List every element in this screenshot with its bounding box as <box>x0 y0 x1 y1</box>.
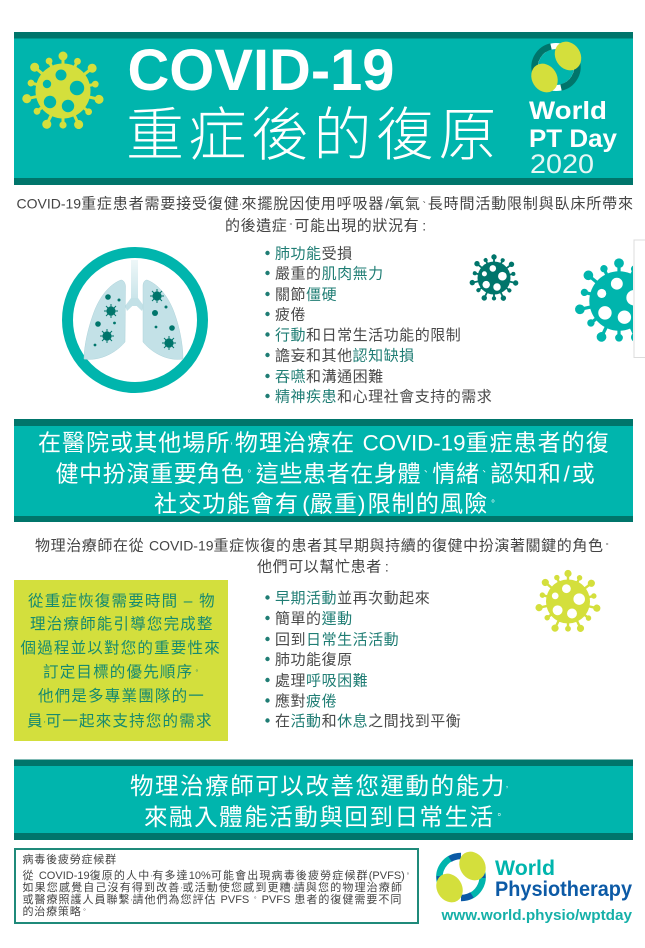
icon: lungs in ring <box>68 252 202 388</box>
World PT Day logo: 2020 <box>530 149 594 179</box>
paragraph: key role: 他們可以幫忙患者: <box>257 558 389 576</box>
title <box>126 38 501 168</box>
title: 重症後的復原 <box>126 103 501 168</box>
banner: role of physiotherapy: 健中扮演重要角色。這些患者在身體、情緒、認知和/或 <box>56 460 595 486</box>
list: how physiotherapists help: 在活動和休息之間找到平衡 <box>275 713 461 730</box>
callout: lime box: 員,可一起來支持您的需求 <box>27 711 213 730</box>
panel: post-viral fatigue syndrome: 病毒後疲勞症候群 <box>22 852 117 866</box>
icon: dark virus <box>469 254 519 302</box>
World Physiotherapy logo: Physiotherapy <box>495 878 632 901</box>
callout: lime box: 訂定目標的優先順序。 <box>43 663 200 681</box>
list: possible conditions: 嚴重的肌肉無力 <box>275 266 384 282</box>
list: possible conditions: 肺功能受損 <box>275 246 353 262</box>
panel: post-viral fatigue syndrome: 或醫療照護人員聯繫,請他們為您評估 PVFS 。 PVFS 患者的復健需要不同 <box>22 892 402 906</box>
list: how physiotherapists help: 回到日常生活活動 <box>275 632 399 648</box>
list: possible conditions: 行動和日常生活功能的限制 <box>275 327 461 344</box>
callout: lime box: 他們是多專業團隊的一 <box>38 687 205 705</box>
icon: lime virus small <box>535 570 601 633</box>
callout: lime box: 從重症恢復需要時間 – 物 <box>28 592 216 610</box>
banner: improve ability: 來融入體能活動與回到日常生活。 <box>144 804 506 830</box>
banner: improve ability: 物理治療師可以改善您運動的能力, <box>130 773 510 799</box>
intro text: 的後遺症。可能出現的狀況有: <box>225 218 426 234</box>
list: how physiotherapists help: 處理呼吸困難 <box>275 672 368 690</box>
list: possible conditions: 關節僵硬 <box>275 286 337 304</box>
website url: www.world.physio/wptday <box>440 907 633 924</box>
banner: improve ability <box>14 760 633 840</box>
title: COVID-19 <box>128 38 394 103</box>
intro text <box>16 196 634 234</box>
icon: teal virus clipped <box>575 258 633 342</box>
list: how physiotherapists help: 肺功能復原 <box>275 652 353 668</box>
callout: lime box: 理治療師能引導您完成整 <box>30 615 214 633</box>
list: possible conditions: 譫妄和其他認知缺損 <box>275 348 415 364</box>
World Physiotherapy logo: World <box>495 857 555 880</box>
list: possible conditions: 疲倦 <box>275 306 306 324</box>
paragraph: key role: 物理治療師在從 COVID-19重症恢復的患者其早期與持續的復健中扮演著關鍵的角色。 <box>35 538 611 554</box>
list: how physiotherapists help: 應對疲倦 <box>275 692 337 710</box>
list: how physiotherapists help: 簡單的運動 <box>275 610 353 628</box>
panel: post-viral fatigue syndrome: 的治療策略。 <box>22 904 88 918</box>
intro text: COVID-19重症患者需要接受復健,來擺脫因使用呼吸器/氧氣、長時間活動限制與臥床所帶來 <box>16 196 634 212</box>
icon: lime virus <box>21 52 104 131</box>
World PT Day logo: World <box>529 97 607 125</box>
list: possible conditions: 吞嚥和溝通困難 <box>275 368 384 386</box>
World Physiotherapy logo <box>431 847 632 907</box>
callout: lime box <box>14 580 228 741</box>
callout: lime box: 個過程並以對您的重要性來 <box>20 639 221 657</box>
list: possible conditions: 精神疾患和心理社會支持的需求 <box>275 388 492 406</box>
banner: role of physiotherapy: 社交功能會有(嚴重)限制的風險。 <box>154 490 500 516</box>
banner: role of physiotherapy <box>14 419 633 522</box>
World PT Day logo: PT Day <box>529 125 617 153</box>
list: how physiotherapists help <box>265 590 461 730</box>
list: possible conditions <box>265 246 492 406</box>
panel: post-viral fatigue syndrome: 從 COVID-19復原的人中,有多達10%可能會出現病毒後疲勞症候群(PVFS)。 <box>22 868 411 882</box>
World PT Day logo <box>526 37 617 179</box>
paragraph: key role <box>35 538 611 576</box>
header banner <box>14 32 633 185</box>
panel: post-viral fatigue syndrome: 如果您感覺自己沒有得到改善,或活動使您感到更糟,請與您的物理治療師 <box>22 880 403 894</box>
panel: post-viral fatigue syndrome <box>15 849 418 923</box>
list: how physiotherapists help: 早期活動並再次動起來 <box>275 590 430 607</box>
banner: role of physiotherapy: 在醫院或其他場所,物理治療在 COVID-19重症患者的復 <box>38 430 610 456</box>
